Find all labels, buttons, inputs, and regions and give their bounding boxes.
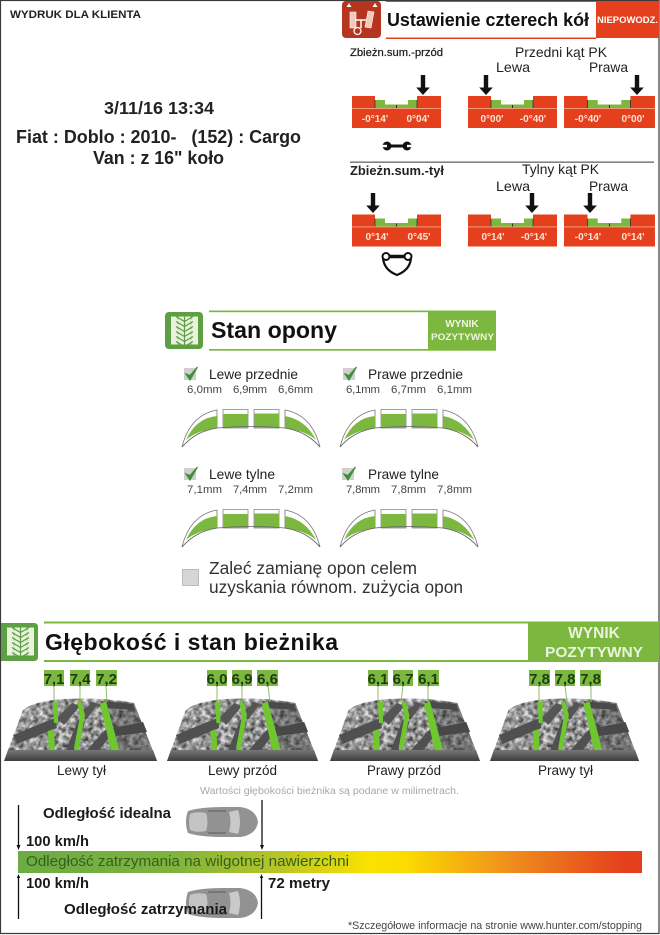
status badge: passed <box>428 311 496 350</box>
status badge: failed <box>596 1 659 38</box>
rear toe gauge <box>350 164 445 246</box>
rear camber heading: Prawa <box>589 178 628 194</box>
icon: tread depth <box>1 623 38 661</box>
ideal distance: 100 km/h <box>26 833 89 850</box>
icon: wrench <box>381 142 413 150</box>
status badge: passed: WYNIK <box>445 319 479 330</box>
tyre: right rear <box>340 466 478 547</box>
vehicle information: Van : z 16" koło <box>93 148 224 168</box>
tyre tread: right rear <box>490 670 639 778</box>
actual stopping distance: 100 km/h <box>26 875 89 892</box>
panel: tyre condition <box>165 310 496 597</box>
tyre tread: left rear: 7,2 <box>96 671 117 688</box>
status badge: passed: WYNIK <box>568 625 621 642</box>
front camber right gauge: 0°00' <box>621 114 645 125</box>
stopping distance bar <box>18 851 642 873</box>
rear toe gauge: Zbieżn.sum.-tył <box>350 164 445 178</box>
rear camber right gauge: -0°14' <box>575 232 601 243</box>
vehicle information <box>16 98 301 168</box>
front toe gauge: -0°14' <box>362 114 388 125</box>
ideal distance <box>16 800 264 850</box>
rear camber heading: Tylny kąt PK <box>522 161 600 177</box>
front camber left gauge: -0°40' <box>520 114 546 125</box>
actual stopping distance <box>17 874 331 919</box>
status badge: failed: NIEPOWODZ. <box>597 15 658 26</box>
rear toe gauge: 0°45' <box>407 232 431 243</box>
rear camber right gauge: 0°14' <box>621 232 645 243</box>
front camber heading <box>496 44 628 75</box>
front camber heading: Przedni kąt PK <box>515 44 608 60</box>
panel: wheel alignment <box>342 1 659 275</box>
tyre: left rear: 7,1mm <box>187 484 222 496</box>
tyre: left rear: 7,2mm <box>278 484 313 496</box>
panel: tread depth <box>1 622 660 797</box>
status badge: passed: POZYTYWNY <box>431 332 495 342</box>
tyre: left rear: Lewe tylne <box>209 466 275 482</box>
status badge: passed <box>528 622 659 662</box>
tyre tread: left front: 6,6 <box>257 671 278 688</box>
front camber heading: Lewa <box>496 59 530 75</box>
tyre: left rear: 7,4mm <box>233 484 267 496</box>
front toe gauge: 0°04' <box>406 114 430 125</box>
tyre tread: right front <box>330 670 480 778</box>
footnote: *Szczegółowe informacje na stronie www.hunter.com/stopping <box>348 920 642 932</box>
rear camber heading: Lewa <box>496 178 530 194</box>
alignment heading: Ustawienie czterech kół <box>387 10 589 30</box>
front camber left gauge <box>468 75 557 128</box>
tyre: right rear: 7,8mm <box>346 484 380 496</box>
tyre: left front: 6,9mm <box>233 384 267 396</box>
tyre tread: right rear: 7,8 <box>529 671 550 688</box>
tyre tread: right front: 6,1 <box>368 671 388 688</box>
front camber right gauge: -0°40' <box>575 114 601 125</box>
rear camber left gauge: 0°14' <box>481 232 505 243</box>
tyre: right front: 6,1mm <box>437 384 472 396</box>
tyre tread: left front: 6,9 <box>232 671 252 688</box>
rotation recommendation <box>182 558 463 597</box>
tyre: left rear <box>182 466 320 547</box>
tyre: right front: 6,1mm <box>346 384 380 396</box>
rear camber left gauge <box>468 193 557 246</box>
front camber right gauge <box>564 75 655 128</box>
tyre condition heading: Stan opony <box>211 317 337 343</box>
tyre: left front: Lewe przednie <box>209 366 298 382</box>
stopping distance bar: Odległość zatrzymania na wilgotnej nawierzchni <box>26 853 349 870</box>
tyre tread: right rear: 7,8 <box>580 671 601 688</box>
tyre: right rear: Prawe tylne <box>368 466 439 482</box>
report label: WYDRUK DLA KLIENTA <box>10 9 141 21</box>
tyre tread: left front: Lewy przód <box>208 763 277 778</box>
rear toe gauge: 0°14' <box>365 232 389 243</box>
front toe gauge: Zbieżn.sum.-przód <box>350 47 443 59</box>
tyre tread: right rear: Prawy tył <box>538 763 593 778</box>
tyre tread: left rear: Lewy tył <box>57 763 106 778</box>
tyre: left front: 6,6mm <box>278 384 313 396</box>
vehicle information: 3/11/16 13:34 <box>104 98 214 118</box>
tyre tread: right front: Prawy przód <box>367 763 441 778</box>
tyre tread: left rear: 7,4 <box>70 671 91 688</box>
ideal distance: Odległość idealna <box>43 805 172 822</box>
rear camber heading <box>496 161 628 194</box>
tyre: left front <box>182 366 320 447</box>
icon: tyre tread <box>165 312 203 349</box>
rotation recommendation: uzyskania równom. zużycia opon <box>209 577 463 597</box>
tyre tread: left rear <box>4 670 157 778</box>
rotation recommendation: Zaleć zamianę opon celem <box>209 558 417 578</box>
tyre: right rear: 7,8mm <box>437 484 472 496</box>
front camber left gauge: 0°00' <box>480 114 504 125</box>
status badge: passed: POZYTYWNY <box>545 645 643 661</box>
icon: axle alignment <box>342 1 381 38</box>
rear camber right gauge <box>564 193 655 246</box>
actual stopping distance: Odległość zatrzymania <box>64 901 228 918</box>
tyre: right front <box>340 366 478 447</box>
actual stopping distance: 72 metry <box>268 875 331 892</box>
vehicle information: Fiat : Doblo : 2010- (152) : Cargo <box>16 127 301 147</box>
rear camber left gauge: -0°14' <box>521 232 547 243</box>
tyre tread: left rear: 7,1 <box>44 671 64 688</box>
tyre tread: right front: 6,7 <box>393 671 413 688</box>
tyre: left front: 6,0mm <box>187 384 222 396</box>
icon: rear axle <box>382 253 412 275</box>
tyre: right rear: 7,8mm <box>391 484 426 496</box>
tyre: right front: 6,7mm <box>391 384 426 396</box>
front camber heading: Prawa <box>589 59 628 75</box>
tyre tread: left front: 6,0 <box>207 671 227 688</box>
tread depth heading: Głębokość i stan bieżnika <box>45 629 338 655</box>
tyre tread: right front: 6,1 <box>418 671 439 688</box>
panel: stopping distance <box>16 800 642 932</box>
front toe gauge <box>350 47 443 128</box>
tyre tread: left front <box>167 670 318 778</box>
tread depth note: Wartości głębokości bieżnika są podane w milimetrach. <box>200 786 459 797</box>
tyre: right front: Prawe przednie <box>368 366 463 382</box>
tyre tread: right rear: 7,8 <box>555 671 575 688</box>
